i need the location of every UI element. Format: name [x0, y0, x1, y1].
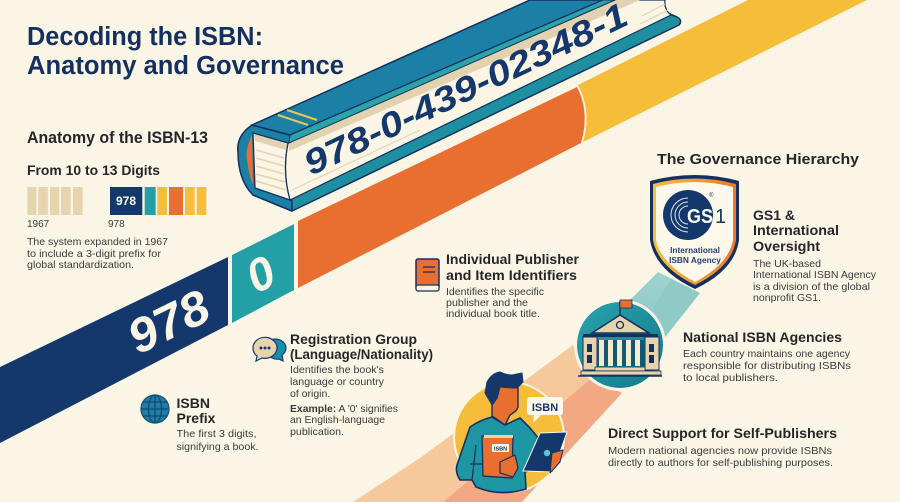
text: publisher identifiers: publisher and the — [446, 297, 528, 309]
chart labels: 978 — [108, 219, 125, 230]
text: direct support: Modern national agencies now provide ISBNs — [608, 445, 832, 457]
book ISBN number: 978-0-439-02348-1 — [298, 0, 634, 183]
text: registration group: Example: A '0' signifies — [290, 403, 398, 415]
connector: beam from shield to national agencies — [600, 272, 700, 350]
author hand — [500, 455, 518, 477]
icon: globe — [141, 395, 169, 423]
text: registration group: Registration Group — [290, 331, 417, 347]
book shadowed pages — [289, 0, 640, 151]
speech bubble: ISBN — [532, 402, 558, 414]
author neck and face — [492, 386, 518, 425]
author shirt — [456, 417, 540, 493]
text: ISBN prefix: Prefix — [176, 410, 216, 426]
text: direct support — [608, 425, 837, 469]
icon: self-publishing author — [453, 372, 567, 493]
text: ISBN prefix — [176, 395, 258, 453]
book page edge face — [285, 0, 671, 200]
icon: chat bubbles — [253, 337, 286, 361]
ISBN band: item segment — [578, 0, 867, 142]
icon: book — [416, 259, 439, 291]
text: national agencies: Each country maintains one agency — [683, 348, 851, 360]
text: registration group: language or country — [290, 376, 385, 388]
author tablet — [523, 432, 567, 473]
title: Anatomy and Governance — [27, 52, 344, 80]
title: Decoding the ISBN: — [27, 23, 263, 51]
text: publisher identifiers: Identifies the specific — [446, 286, 544, 298]
author arm lines — [470, 445, 483, 480]
text: national agencies: responsible for distributing ISBNs — [683, 360, 851, 372]
book spine bands — [278, 110, 317, 125]
text: direct support: directly to authors for self-publishing purposes. — [608, 457, 833, 469]
heading: governance: The Governance Hierarchy — [657, 152, 859, 168]
text: anatomy description — [27, 236, 168, 271]
text: registration group: an English-language — [290, 414, 385, 426]
text: GS1 oversight: nonprofit GS1. — [753, 292, 821, 304]
ISBN band: registration group segment: 0 — [238, 245, 284, 303]
text: anatomy description: global standardization. — [27, 259, 134, 271]
text: ISBN prefix: ISBN — [176, 395, 210, 411]
shield label — [669, 245, 721, 265]
text: registration group: publication. — [290, 426, 344, 438]
chart labels — [27, 219, 125, 230]
title — [27, 23, 344, 80]
text: anatomy description: to include a 3-digit prefix for — [27, 248, 162, 260]
text: GS1 oversight — [753, 207, 877, 304]
text: publisher identifiers — [446, 251, 580, 320]
text: publisher identifiers: and Item Identifiers — [446, 267, 577, 283]
text: ISBN prefix: signifying a book. — [176, 441, 258, 453]
connector: peach beam to self-publishers — [353, 345, 622, 502]
book end pages — [253, 133, 290, 200]
book orange inner edge — [247, 135, 253, 185]
text: registration group: Identifies the book's — [290, 364, 384, 376]
text: publisher identifiers: Individual Publisher — [446, 251, 580, 267]
chart: 13-digit bar — [110, 187, 206, 215]
GS1 logo — [663, 190, 726, 240]
book teal strip — [289, 0, 615, 143]
text: anatomy description: The system expanded in 1967 — [27, 236, 168, 248]
text: GS1 oversight: International ISBN Agency — [753, 269, 877, 281]
text: direct support: Direct Support for Self-Publishers — [608, 425, 837, 441]
shield label: ISBN Agency — [669, 255, 721, 265]
author hair — [485, 372, 523, 405]
ISBN band: prefix segment: 978 — [120, 280, 219, 365]
ISBN band: prefix segment — [0, 257, 228, 443]
text: GS1 oversight: is a division of the global — [753, 281, 870, 293]
icon: GS1 shield — [650, 175, 739, 289]
book bottom cover — [253, 14, 681, 211]
text: GS1 oversight: Oversight — [753, 238, 820, 254]
text: ISBN prefix: The first 3 digits, — [176, 428, 256, 440]
text: national agencies: to local publishers. — [683, 372, 778, 384]
text: registration group — [290, 331, 433, 438]
text: GS1 oversight: International — [753, 222, 839, 238]
GS1 logo: ® — [709, 192, 714, 199]
chart labels: 1967 — [27, 219, 50, 230]
ISBN band: publisher segment — [298, 87, 585, 288]
shield label: International — [670, 245, 720, 255]
icon: national agency building — [574, 299, 666, 391]
GS1 logo: 1 — [715, 206, 726, 228]
book spine top — [252, 0, 603, 135]
GS1 logo: GS — [687, 206, 713, 228]
book left cover — [238, 125, 292, 211]
book — [238, 0, 681, 211]
book page lines near right end — [292, 4, 668, 190]
author book: ISBN — [494, 446, 507, 452]
text: national agencies — [683, 329, 851, 384]
text: national agencies: National ISBN Agencies — [683, 329, 842, 345]
text: GS1 oversight: GS1 & — [753, 207, 795, 223]
chart: 13-digit bar: 978 — [116, 194, 136, 208]
text: registration group: of origin. — [290, 388, 330, 400]
book end page shadow — [254, 134, 287, 150]
heading: from 10 to 13 digits: From 10 to 13 Digits — [27, 162, 160, 178]
text: registration group: (Language/Nationality) — [290, 346, 433, 362]
ISBN band: registration group segment — [232, 224, 294, 323]
text: GS1 oversight: The UK-based — [753, 258, 821, 270]
chart: 10-digit bar — [27, 187, 83, 215]
text: publisher identifiers: individual book title. — [446, 308, 540, 320]
heading: anatomy: Anatomy of the ISBN-13 — [27, 129, 208, 147]
